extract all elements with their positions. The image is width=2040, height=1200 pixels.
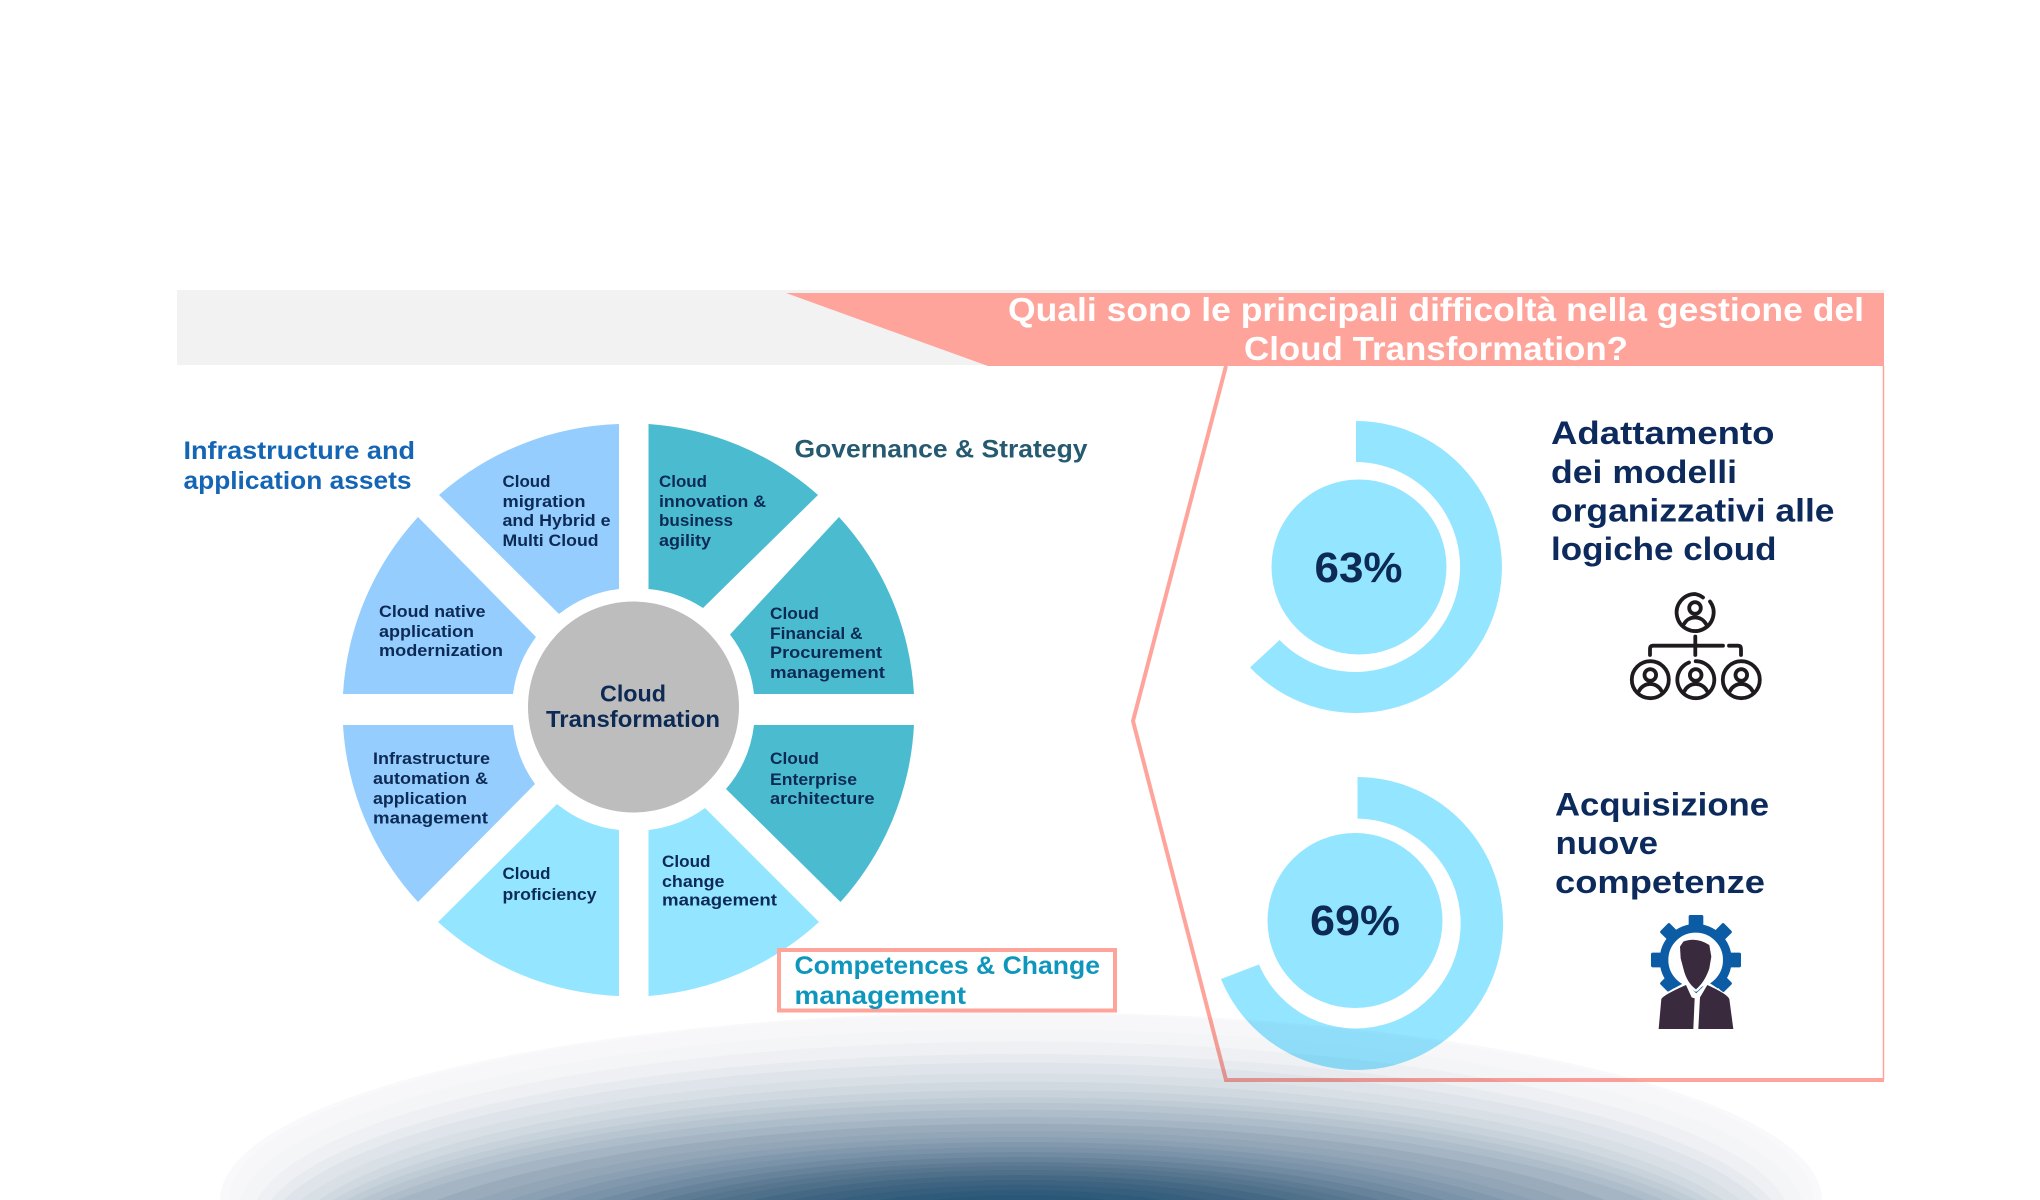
text: acquisizione nuove competenze: competenze: [1555, 864, 1765, 900]
segment: infrastructure automation: Infrastructure: [373, 749, 490, 768]
segment: cloud native: [343, 517, 536, 694]
segment: infrastructure automation: application: [373, 789, 467, 808]
gauge: 63 percent: [1250, 421, 1502, 713]
heading: governance and strategy: Governance & Strategy: [794, 436, 1088, 464]
segment: cloud proficiency: Cloud: [502, 864, 550, 883]
text: acquisizione nuove competenze: nuove: [1556, 825, 1658, 861]
heading box: competences and change management: [779, 950, 1115, 1010]
segment: cloud innovation: [648, 424, 818, 608]
segment: cloud change management: Cloud: [662, 852, 710, 871]
icon: org chart: [1632, 594, 1760, 698]
gauge: 69 percent: 69%: [1310, 897, 1400, 945]
wheel centre: Cloud: [600, 680, 666, 706]
heading: infrastructure and application assets: application assets: [184, 467, 412, 495]
text: adattamento dei modelli: dei modelli: [1551, 454, 1737, 490]
text: adattamento dei modelli: Adattamento: [1551, 415, 1774, 451]
panel frame: difficulties: [1133, 366, 1884, 1080]
segment: cloud migration: Multi Cloud: [502, 531, 598, 550]
segment: cloud financial: Cloud: [770, 604, 819, 623]
title: Quali sono le principali difficoltà nella gestione del: [1008, 291, 1864, 328]
segment: cloud innovation: Cloud: [659, 472, 707, 491]
text: adattamento dei modelli: organizzativi alle: [1551, 492, 1834, 528]
segment: cloud native: application: [379, 622, 474, 641]
segment: cloud enterprise architecture: [726, 725, 914, 902]
segment: cloud financial: Financial &: [770, 624, 862, 643]
gauge: 63 percent: 63%: [1314, 544, 1402, 592]
segment: cloud enterprise architecture: architecture: [770, 789, 874, 808]
wheel centre: [528, 602, 739, 812]
segment: cloud migration: and Hybrid e: [502, 511, 610, 530]
segment: cloud proficiency: proficiency: [502, 885, 597, 904]
background dome gradient: [220, 1012, 1822, 1200]
segment: cloud migration: [439, 424, 619, 614]
segment: cloud migration: Cloud: [502, 472, 550, 491]
segment: infrastructure automation: automation &: [373, 769, 488, 788]
segment: cloud change management: management: [662, 890, 777, 910]
icon: person with gear: [1651, 915, 1741, 1029]
segment: cloud native: modernization: [379, 641, 503, 660]
segment: cloud native: Cloud native: [379, 602, 486, 621]
segment: cloud migration: migration: [502, 492, 586, 511]
heading box: competences and change management: Competences & Change: [794, 952, 1100, 980]
segment: cloud change management: change: [662, 872, 724, 891]
text: acquisizione nuove competenze: Acquisizione: [1555, 786, 1769, 822]
gauge: 69 percent: [1221, 777, 1503, 1070]
segment: infrastructure automation: management: [373, 808, 488, 828]
segment: cloud change management: [648, 808, 819, 996]
segment: cloud financial: Procurement: [770, 643, 882, 662]
heading box: competences and change management: management: [794, 982, 967, 1010]
segment: cloud financial: management: [770, 663, 885, 682]
header banner: salmon: [786, 291, 1884, 367]
title: [1008, 291, 1864, 367]
wheel: cloud transformation: [343, 424, 914, 996]
heading: infrastructure and application assets: Infrastructure and: [184, 437, 415, 465]
title: Cloud Transformation?: [1244, 330, 1628, 367]
segment: cloud financial: [730, 517, 914, 694]
segment: cloud proficiency: [438, 804, 619, 996]
segment: cloud innovation: agility: [659, 531, 712, 550]
segment: cloud enterprise architecture: Cloud: [770, 749, 819, 768]
header band: grey background: [177, 290, 1884, 365]
wheel centre: Transformation: [546, 706, 720, 732]
text: adattamento dei modelli: logiche cloud: [1551, 531, 1776, 567]
segment: cloud innovation: business: [659, 511, 733, 530]
segment: infrastructure automation: [343, 725, 535, 902]
segment: cloud enterprise architecture: Enterprise: [770, 770, 857, 789]
segment: cloud innovation: innovation &: [659, 492, 766, 511]
